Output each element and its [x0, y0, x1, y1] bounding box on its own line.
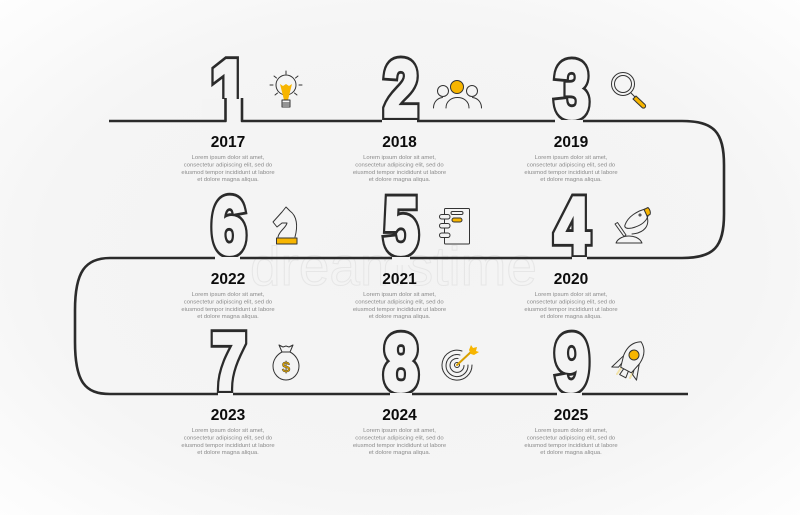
digit 7: 7 [212, 318, 246, 407]
digit 9: 9 [555, 319, 589, 408]
digit 1: 1 [211, 44, 247, 133]
digit 4: 4 [555, 182, 589, 271]
digit foot openings [202, 99, 587, 401]
text block 2023: et dolore magna aliqua. [197, 450, 259, 456]
text block 2022: consectetur adipiscing elit, sed do [184, 299, 273, 305]
digit 8: 8 [384, 319, 418, 408]
icon: rocket [610, 335, 653, 383]
text block 2019: consectetur adipiscing elit, sed do [527, 162, 616, 168]
text block 2021: consectetur adipiscing elit, sed do [355, 299, 444, 305]
text block 2021: et dolore magna aliqua. [369, 314, 431, 320]
text block 2024: eiusmod tempor incididunt ut labore [353, 443, 447, 449]
year 2019: 2019 [554, 134, 589, 151]
year 2023: 2023 [211, 407, 246, 424]
text block 2017: consectetur adipiscing elit, sed do [184, 162, 273, 168]
text block 2020: consectetur adipiscing elit, sed do [527, 299, 616, 305]
text block 2022: Lorem ipsum dolor sit amet, [192, 292, 265, 298]
text block 2017: Lorem ipsum dolor sit amet, [192, 155, 265, 161]
year 2024: 2024 [382, 407, 417, 424]
text block 2020: Lorem ipsum dolor sit amet, [535, 292, 608, 298]
year 2022: 2022 [211, 271, 245, 288]
text block 2021: Lorem ipsum dolor sit amet, [363, 292, 436, 298]
text block 2018: eiusmod tempor incididunt ut labore [353, 170, 447, 176]
text block 2017: eiusmod tempor incididunt ut labore [181, 170, 275, 176]
text block 2017: et dolore magna aliqua. [197, 177, 259, 183]
text block 2018: consectetur adipiscing elit, sed do [355, 162, 444, 168]
digit 6: 6 [212, 182, 246, 271]
icon: light bulb [270, 71, 302, 107]
icon: target [442, 345, 479, 380]
digit 6: 6 [212, 182, 246, 271]
icon: notebook [440, 208, 470, 244]
digit 1: 1 [211, 44, 247, 133]
watermark: dreamstime [250, 235, 537, 297]
icon: money bag: $ [282, 359, 291, 376]
digit 2: 2 [384, 45, 418, 134]
digit 5: 5 [384, 182, 418, 271]
text block 2021: eiusmod tempor incididunt ut labore [353, 307, 447, 313]
year 2020: 2020 [554, 271, 588, 288]
year 2018: 2018 [382, 134, 417, 151]
text block 2020: eiusmod tempor incididunt ut labore [524, 307, 618, 313]
text block 2024: et dolore magna aliqua. [369, 450, 431, 456]
text block 2024: Lorem ipsum dolor sit amet, [363, 428, 436, 434]
text block 2023: Lorem ipsum dolor sit amet, [192, 428, 265, 434]
text block 2022: eiusmod tempor incididunt ut labore [181, 307, 275, 313]
digit 3: 3 [555, 46, 589, 135]
digit 3: 3 [555, 46, 589, 135]
text block 2025: Lorem ipsum dolor sit amet, [535, 428, 608, 434]
year 2021: 2021 [382, 271, 417, 288]
text block 2023: consectetur adipiscing elit, sed do [184, 435, 273, 441]
digit 4: 4 [555, 182, 589, 271]
icon: money bag [273, 345, 299, 380]
text block 2025: eiusmod tempor incididunt ut labore [524, 443, 618, 449]
digit 7: 7 [212, 318, 246, 407]
year 2017: 2017 [211, 134, 245, 151]
text block 2020: et dolore magna aliqua. [540, 314, 602, 320]
text block 2019: et dolore magna aliqua. [540, 177, 602, 183]
digit 2: 2 [384, 45, 418, 134]
icon: people [434, 80, 482, 108]
text block 2019: Lorem ipsum dolor sit amet, [535, 155, 608, 161]
text block 2025: consectetur adipiscing elit, sed do [527, 435, 616, 441]
year 2025: 2025 [554, 407, 589, 424]
text block 2023: eiusmod tempor incididunt ut labore [181, 443, 275, 449]
icon: knight [273, 207, 297, 244]
text block 2025: et dolore magna aliqua. [540, 450, 602, 456]
icon: microscope [615, 208, 650, 243]
digit 5: 5 [384, 182, 418, 271]
icon: magnifier [612, 72, 646, 108]
timeline line [75, 98, 724, 394]
text block 2019: eiusmod tempor incididunt ut labore [524, 170, 618, 176]
text block 2018: et dolore magna aliqua. [369, 177, 431, 183]
text block 2018: Lorem ipsum dolor sit amet, [363, 155, 436, 161]
digit 8: 8 [384, 319, 418, 408]
digit 9: 9 [555, 319, 589, 408]
text block 2022: et dolore magna aliqua. [197, 314, 259, 320]
text block 2024: consectetur adipiscing elit, sed do [355, 435, 444, 441]
